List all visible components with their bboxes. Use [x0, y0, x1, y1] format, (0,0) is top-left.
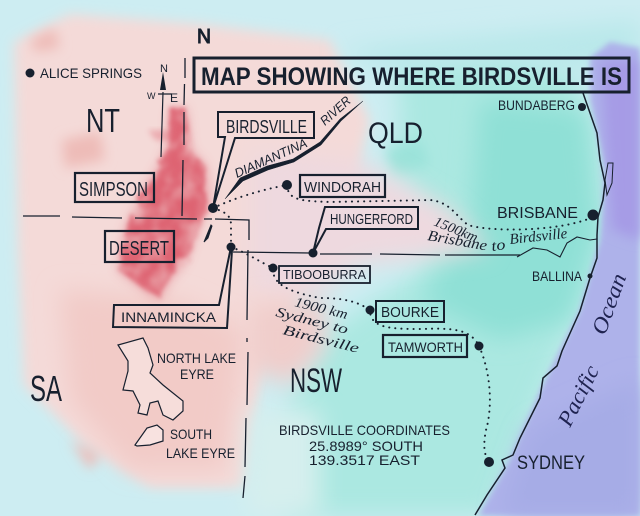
label box: Birdsville: [213, 112, 314, 208]
note: Brisbane to Birdsville distance: 1500km: [432, 215, 480, 246]
label box: Innamincka: INNAMINCKA: [121, 310, 216, 325]
label box: Tamworth: TAMWORTH: [388, 339, 463, 355]
note: Brisbane to Birdsville distance: to: [490, 237, 507, 255]
lake: South Lake Eyre: [135, 425, 163, 446]
label box: Simpson: [75, 173, 154, 202]
watercolour wash: teal land: [245, 20, 640, 516]
label box: Windorah: WINDORAH: [304, 179, 381, 196]
watercolour wash: pink over route area: [250, 150, 490, 300]
label: South Lake Eyre: LAKE EYRE: [166, 445, 235, 461]
compass: N: [160, 63, 168, 75]
label box: Bourke: BOURKE: [381, 304, 439, 321]
note: Brisbane to Birdsville distance: Birdsville: [509, 226, 568, 248]
label: Bundaberg: BUNDABERG: [498, 97, 575, 113]
note: Sydney to Birdsville distance: [274, 295, 360, 357]
label box: Simpson: SIMPSON: [79, 179, 148, 201]
town dots: [208, 103, 598, 467]
label: Brisbane: BRISBANE: [497, 205, 578, 222]
compass: [147, 63, 178, 157]
label: River: RIVER: [317, 93, 354, 128]
label box: Birdsville: BIRDSVILLE: [226, 117, 307, 137]
label: Ballina: BALLINA: [532, 268, 583, 284]
label: QLD: QLD: [368, 117, 423, 150]
label box: Tibooburra: TIBOOBURRA: [283, 267, 366, 282]
note: Sydney to Birdsville distance: Sydney to: [274, 305, 349, 338]
lake: North Lake Eyre: [118, 338, 183, 420]
label box: Hungerford: [313, 207, 418, 253]
label box: Tamworth: [383, 335, 467, 357]
label: Pacific Ocean: Pacific: [552, 361, 604, 431]
label box: Desert: DESERT: [109, 238, 169, 260]
label: Diamantina: DIAMANTINA: [232, 135, 309, 181]
slash mark under Birdsville: [204, 225, 212, 242]
text block: Birdsville coordinates: [279, 422, 450, 468]
label box: Hungerford: HUNGERFORD: [330, 211, 413, 228]
watercolour wash: purple ocean: [478, 42, 640, 516]
label box: Desert: [105, 231, 174, 262]
label: Pacific Ocean: [552, 270, 631, 431]
note: Sydney to Birdsville distance: 1900 km: [293, 295, 349, 323]
label: SA: SA: [30, 368, 62, 409]
label: North Lake Eyre: EYRE: [180, 366, 214, 382]
Brisbane river: [517, 237, 597, 257]
label: South Lake Eyre: [166, 426, 235, 461]
label: Sydney: SYDNEY: [517, 453, 585, 474]
watercolour wash: NSW pink patch: [250, 300, 325, 385]
label box: Innamincka: [113, 247, 232, 328]
coastline: [475, 93, 605, 515]
label: NSW: NSW: [290, 362, 342, 400]
compass: E: [170, 91, 178, 105]
watercolour wash: pink land: [14, 14, 370, 488]
Fraser Island: [605, 163, 613, 195]
label: North Lake Eyre: [157, 350, 236, 382]
note: Brisbane to Birdsville distance: [426, 215, 568, 255]
label: North Lake Eyre: NORTH LAKE: [157, 350, 236, 366]
text block: Birdsville coordinates: 25.8989° SOUTH: [309, 438, 423, 454]
dotted routes: [213, 185, 593, 462]
state borders: [23, 58, 520, 498]
north mark: N: [197, 26, 211, 48]
label: Alice Springs: ALICE SPRINGS: [40, 65, 142, 81]
label: Pacific Ocean: Ocean: [586, 270, 631, 338]
compass: W: [147, 91, 156, 101]
label: NT: NT: [86, 102, 120, 139]
note: Brisbane to Birdsville distance: Brisbane: [426, 228, 489, 254]
text block: Birdsville coordinates: BIRDSVILLE COORDINATES: [279, 422, 450, 438]
label: South Lake Eyre: SOUTH: [170, 426, 212, 442]
text block: Birdsville coordinates: 139.3517 EAST: [309, 452, 420, 468]
Diamantina River: [225, 101, 363, 199]
note: Sydney to Birdsville distance: Birdsville: [281, 323, 360, 357]
watercolour wash: red Simpson Desert: [118, 108, 210, 300]
